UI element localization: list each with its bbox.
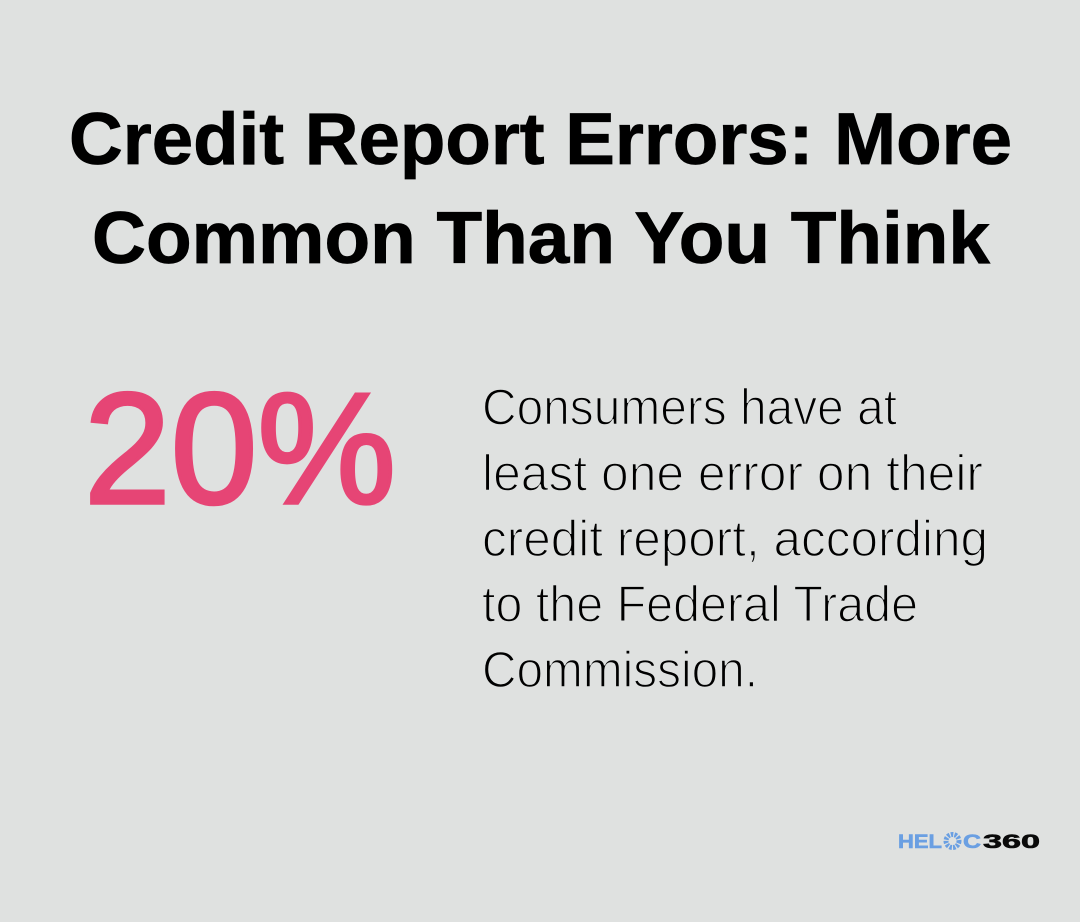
logo letter C: C — [963, 832, 981, 853]
logo number: 360 — [983, 832, 1040, 853]
statistic: 20%: 20% — [84, 361, 396, 537]
description text: Commission. — [482, 641, 758, 698]
title: Common Than You Think — [92, 198, 990, 279]
logo swirl icon — [946, 834, 959, 848]
description text: least one error on their — [482, 444, 983, 502]
logo: HELOC360 — [898, 832, 1040, 853]
description text: Consumers have at — [482, 378, 897, 436]
title: Credit Report Errors: More — [69, 99, 1012, 180]
description text: to the Federal Trade — [482, 576, 918, 632]
description text — [482, 378, 988, 698]
description text: credit report, according — [482, 510, 988, 567]
title — [69, 99, 1012, 279]
logo wordmark blue: HEL — [898, 832, 942, 853]
